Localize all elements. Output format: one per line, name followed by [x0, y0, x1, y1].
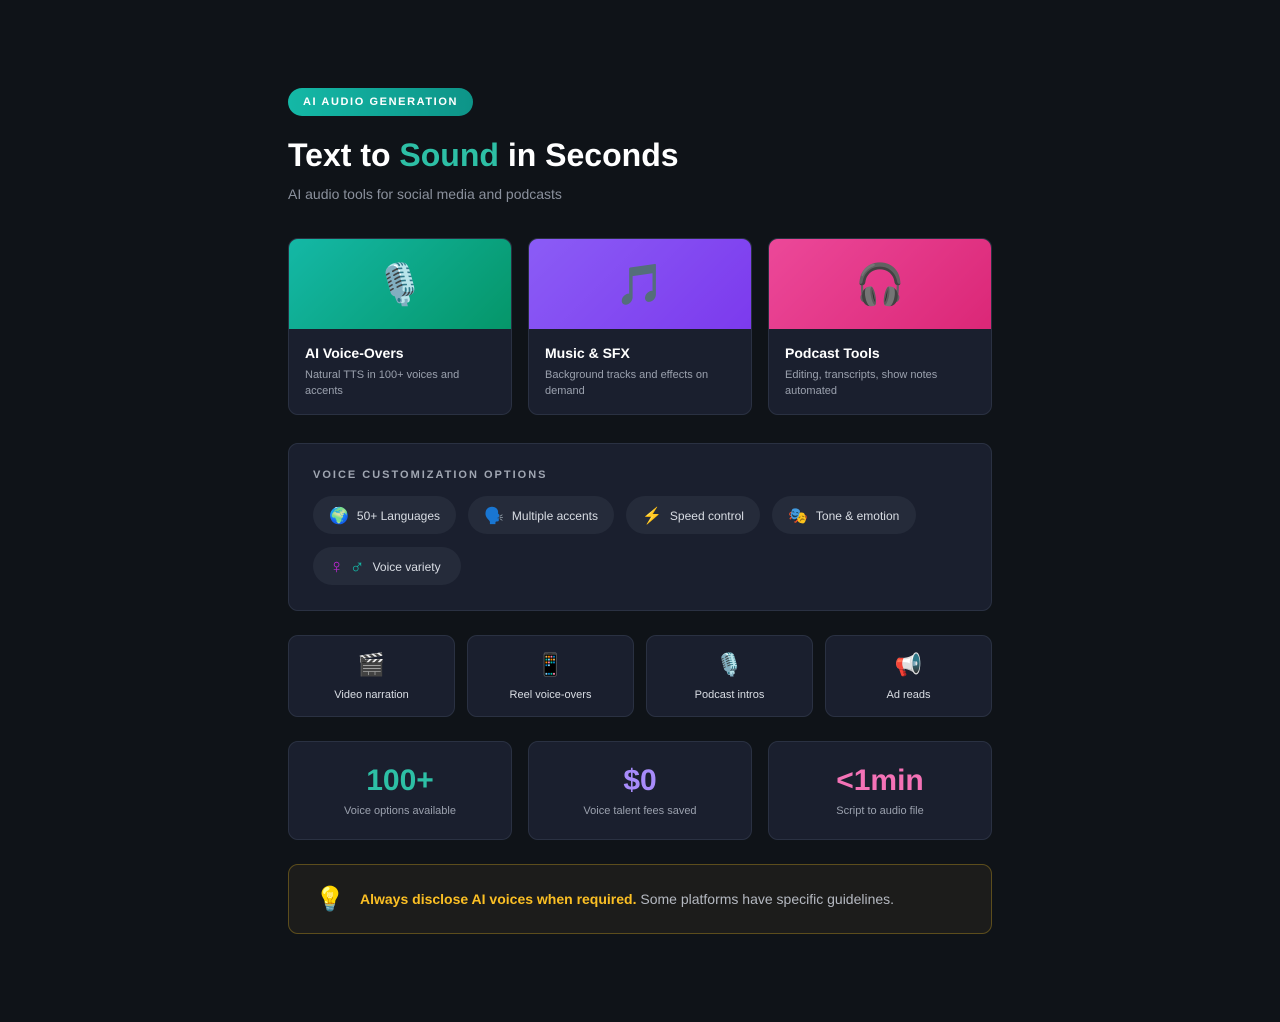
icon: microphone	[289, 239, 511, 329]
title: Text to Sound in Seconds	[288, 137, 679, 173]
use case: reel voice-overs	[467, 635, 634, 717]
use case: ad reads: 📢	[895, 652, 922, 677]
pill: speed: ⚡	[642, 508, 662, 525]
pill: accents: Multiple accents	[512, 509, 598, 523]
stat: fees: $0	[623, 764, 657, 797]
card: Music & SFX: Music & SFX	[545, 345, 630, 361]
pill: voice variety	[313, 547, 461, 585]
pill: tone	[772, 496, 916, 534]
panel: voice customization	[288, 443, 992, 611]
subtitle: AI audio tools for social media and podcasts	[288, 186, 562, 202]
card: Podcast Tools	[768, 238, 992, 415]
pill: speed: Speed control	[670, 509, 744, 523]
pill: languages: 🌍	[329, 508, 349, 525]
stat: time: Script to audio file	[836, 805, 924, 817]
use case: video narration: Video narration	[334, 689, 409, 701]
icon: music: 🎵	[615, 262, 665, 306]
icon: bulb: 💡	[315, 886, 345, 912]
badge: AI AUDIO GENERATION	[303, 96, 458, 108]
stat: voices	[288, 741, 512, 840]
use case: podcast intros: 🎙️	[716, 652, 743, 677]
stat: voices: Voice options available	[344, 805, 456, 817]
card: AI Voice-Overs: Natural TTS in 100+ voices and accents	[305, 369, 459, 397]
stat: fees: Voice talent fees saved	[583, 805, 697, 817]
pill: tone: Tone & emotion	[816, 509, 899, 523]
icon: headphones: 🎧	[855, 262, 905, 306]
panel label: VOICE CUSTOMIZATION OPTIONS	[313, 469, 548, 481]
icon: headphones	[769, 239, 991, 329]
stat: time	[768, 741, 992, 840]
stat: voices: 100+	[366, 764, 434, 797]
icon: microphone: 🎙️	[375, 262, 425, 306]
use case: podcast intros: Podcast intros	[695, 689, 764, 701]
card: Podcast Tools: Editing, transcripts, show notes automated	[785, 369, 937, 397]
use case: ad reads	[825, 635, 992, 717]
use case: ad reads: Ad reads	[886, 689, 931, 701]
pill: voice variety: ♀ ♂	[329, 556, 365, 578]
card: Podcast Tools: Podcast Tools	[785, 345, 880, 361]
pill: languages	[313, 496, 456, 534]
stat: fees	[528, 741, 752, 840]
card: AI Voice-Overs	[288, 238, 512, 415]
pill: accents: 🗣️	[484, 508, 504, 525]
card: Music & SFX	[528, 238, 752, 415]
card: AI Voice-Overs: AI Voice-Overs	[305, 345, 404, 361]
use case: video narration	[288, 635, 455, 717]
use case: video narration: 🎬	[358, 652, 385, 677]
pill: languages: 50+ Languages	[357, 509, 440, 523]
use case: reel voice-overs: Reel voice-overs	[510, 689, 591, 701]
card: Music & SFX: Background tracks and effects on demand	[545, 369, 708, 397]
pill: tone: 🎭	[788, 508, 808, 525]
use case: podcast intros	[646, 635, 813, 717]
callout: Always disclose AI voices when required. Some platforms have specific guidelines.	[360, 891, 894, 907]
pill: voice variety: Voice variety	[373, 560, 441, 574]
pill: speed	[626, 496, 760, 534]
stat: time: <1min	[836, 764, 924, 797]
use case: reel voice-overs: 📱	[537, 652, 564, 677]
callout	[288, 864, 992, 934]
pill: accents	[468, 496, 614, 534]
badge	[288, 88, 473, 116]
icon: music	[529, 239, 751, 329]
